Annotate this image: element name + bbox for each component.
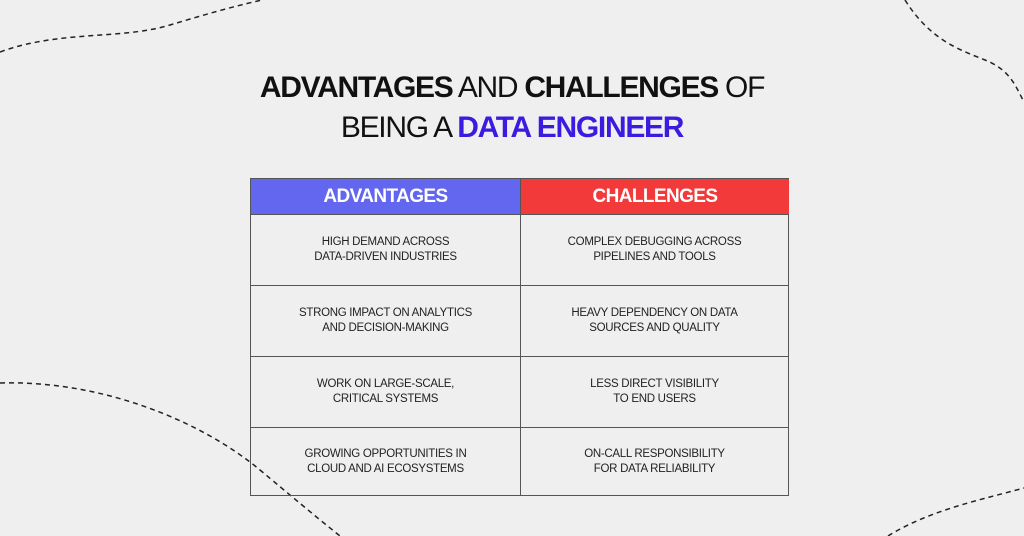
table xyxy=(250,178,789,496)
advantages cells: STRONG IMPACT ON ANALYTICS xyxy=(299,307,472,319)
advantages cells: WORK ON LARGE-SCALE, xyxy=(317,378,454,390)
title: ADVANTAGES AND CHALLENGES OF xyxy=(260,71,764,104)
challenges cells: SOURCES AND QUALITY xyxy=(589,322,720,334)
challenges cells: LESS DIRECT VISIBILITY xyxy=(590,378,719,390)
title xyxy=(260,71,764,144)
header: challenges: CHALLENGES xyxy=(593,186,717,206)
challenges cells: HEAVY DEPENDENCY ON DATA xyxy=(571,307,738,319)
challenges cells xyxy=(520,214,788,496)
advantages cells xyxy=(251,214,520,475)
challenges cells: PIPELINES AND TOOLS xyxy=(593,251,716,263)
advantages cells: CRITICAL SYSTEMS xyxy=(333,393,438,405)
advantages cells: GROWING OPPORTUNITIES IN xyxy=(305,448,466,460)
challenges cells: ON-CALL RESPONSIBILITY xyxy=(584,448,725,460)
title: BEING A DATA ENGINEER xyxy=(341,111,683,144)
header: advantages xyxy=(251,179,520,214)
header: challenges xyxy=(520,179,789,214)
advantages cells: HIGH DEMAND ACROSS xyxy=(322,236,449,248)
header: advantages: ADVANTAGES xyxy=(323,186,448,206)
challenges cells: TO END USERS xyxy=(613,393,696,405)
challenges cells: FOR DATA RELIABILITY xyxy=(594,463,715,475)
challenges cells: COMPLEX DEBUGGING ACROSS xyxy=(568,236,741,248)
advantages cells: DATA-DRIVEN INDUSTRIES xyxy=(314,251,457,263)
advantages cells: AND DECISION-MAKING xyxy=(322,322,449,334)
advantages cells: CLOUD AND AI ECOSYSTEMS xyxy=(307,463,464,475)
